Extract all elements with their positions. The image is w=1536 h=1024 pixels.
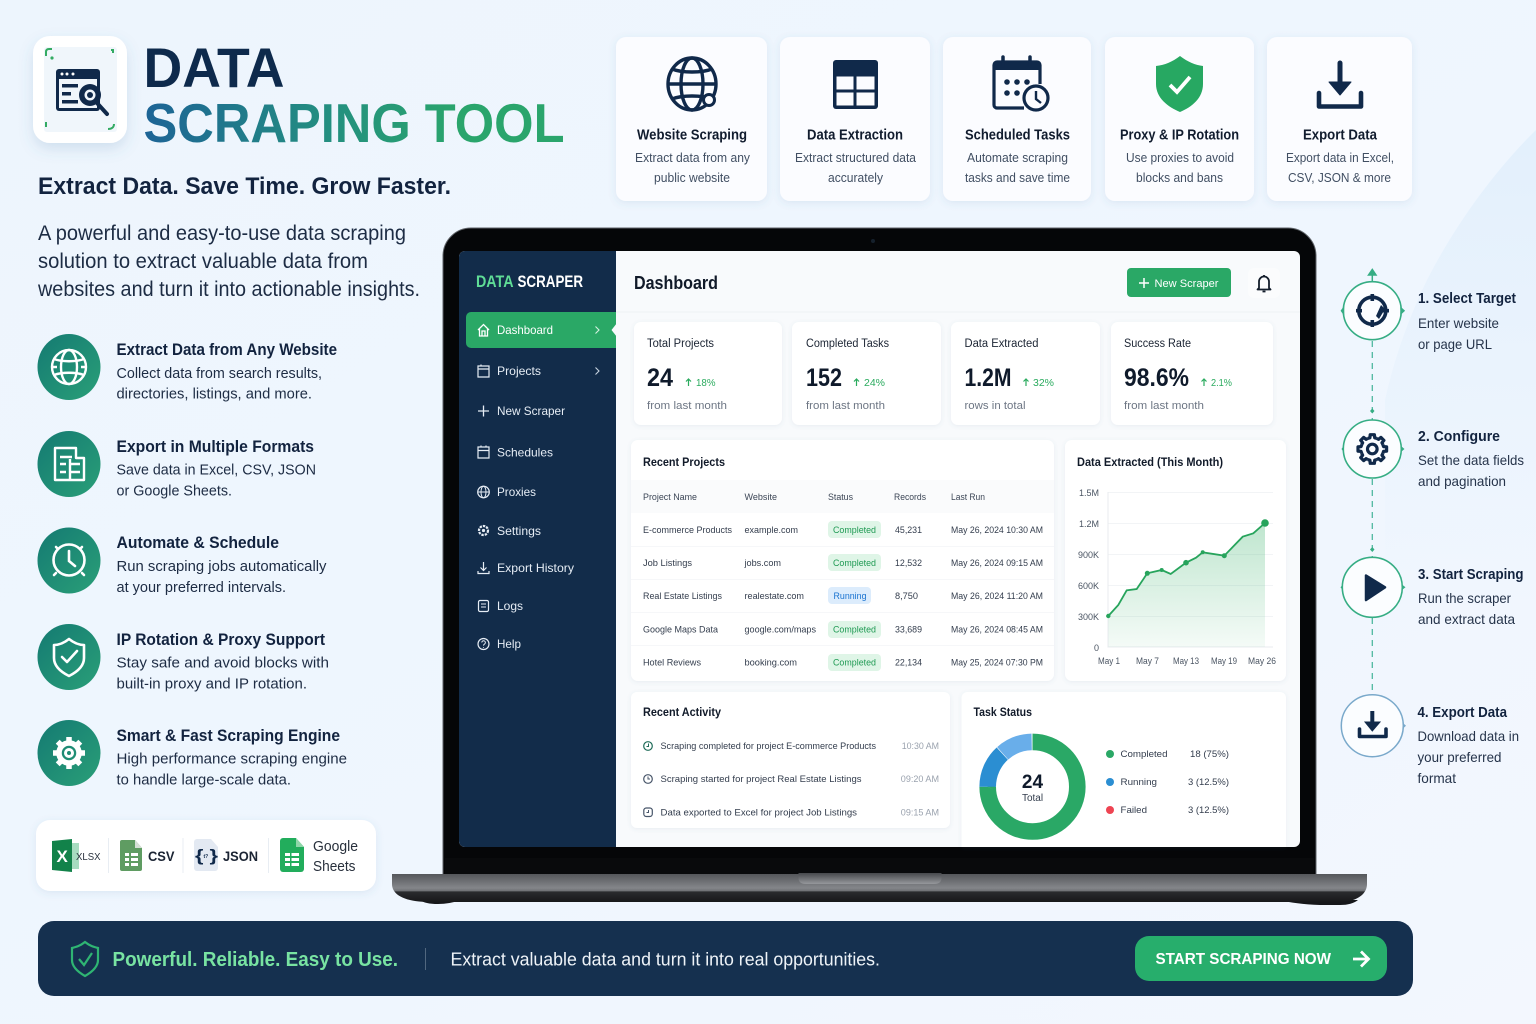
chart: data extracted this month: May 13 bbox=[1173, 656, 1199, 666]
stat: total projects bbox=[634, 322, 782, 425]
feature: proxy support: Stay safe and avoid blocks with bbox=[116, 654, 329, 672]
feature card: data extraction: Extract structured data bbox=[795, 151, 916, 165]
table: recent projects: Records bbox=[894, 492, 926, 502]
feature: fast engine: Smart & Fast Scraping Engine bbox=[116, 727, 340, 745]
feature: proxy support: built-in proxy and IP rotation. bbox=[116, 676, 307, 692]
legend: Running bbox=[1120, 777, 1157, 787]
feature: automate and schedule bbox=[38, 528, 327, 596]
feature card: website scraping: Website Scraping bbox=[637, 128, 747, 144]
step 4: export data: format bbox=[1418, 770, 1456, 786]
table: recent projects: Website bbox=[744, 492, 777, 502]
stat: completed tasks: 152 bbox=[806, 364, 842, 392]
row: google maps: 33,689 bbox=[895, 624, 922, 634]
tagline: Extract Data. Save Time. Grow Faster. bbox=[38, 173, 451, 200]
row: hotel reviews bbox=[643, 654, 1043, 671]
icon: json: t? bbox=[204, 854, 208, 860]
step 3: start scraping: Run the scraper bbox=[1418, 590, 1511, 606]
step 3: start scraping: and extract data bbox=[1418, 611, 1515, 627]
step 1: select target: 1. Select Target bbox=[1418, 291, 1516, 307]
stat: success rate: Success Rate bbox=[1124, 338, 1191, 350]
stat: completed tasks: Completed Tasks bbox=[806, 338, 889, 350]
row: job listings: jobs.com bbox=[744, 558, 781, 568]
row: hotel reviews: May 25, 2024 07:30 PM bbox=[951, 658, 1043, 668]
row: real estate: 8,750 bbox=[895, 591, 918, 601]
icon: google sheets bbox=[280, 838, 358, 875]
feature: fast engine bbox=[38, 720, 347, 788]
step 2: configure: Set the data fields bbox=[1418, 452, 1524, 468]
feature: fast engine: to handle large-scale data. bbox=[116, 772, 291, 788]
legend: 18 (75%) bbox=[1190, 749, 1229, 759]
activity row 3 bbox=[644, 808, 939, 818]
panel: task status: Task Status bbox=[974, 707, 1032, 719]
feature: export formats: or Google Sheets. bbox=[116, 482, 232, 500]
feature: export formats: Export in Multiple Formats bbox=[116, 438, 314, 456]
stat: total projects: 24 bbox=[647, 364, 673, 392]
nav item: help: Help bbox=[497, 637, 521, 651]
title bbox=[144, 36, 564, 154]
title: DATA bbox=[144, 36, 284, 99]
feature card: website scraping: public website bbox=[654, 171, 730, 185]
nav item: projects bbox=[478, 364, 599, 378]
row: job listings: May 26, 2024 09:15 AM bbox=[951, 558, 1043, 568]
step 2: configure: 2. Configure bbox=[1418, 429, 1500, 445]
table: recent projects bbox=[631, 440, 1054, 681]
feature: automate and schedule: Run scraping jobs automatically bbox=[116, 558, 327, 575]
nav item: logs: Logs bbox=[497, 599, 523, 613]
feature card: website scraping: Extract data from any bbox=[635, 151, 751, 165]
icon: json: { } bbox=[195, 846, 218, 865]
stat: completed tasks bbox=[792, 322, 941, 425]
feature: extract from any website: directories, listings, and more. bbox=[116, 386, 312, 402]
step 1: select target bbox=[1342, 270, 1516, 352]
feature card: proxy rotation: Use proxies to avoid bbox=[1126, 151, 1234, 165]
chart: data extracted this month bbox=[1065, 440, 1286, 681]
row: real estate: Real Estate Listings bbox=[643, 591, 722, 601]
dashboard screen bbox=[459, 251, 1300, 847]
feature card: scheduled tasks: Scheduled Tasks bbox=[965, 128, 1070, 144]
chart: data extracted this month: 1.5M bbox=[1079, 488, 1099, 498]
icon: xlsx: X bbox=[56, 847, 68, 866]
stat: success rate: from last month bbox=[1124, 400, 1204, 412]
feature card: website scraping bbox=[616, 37, 767, 201]
step 4: export data: your preferred bbox=[1418, 749, 1502, 765]
icon: json bbox=[194, 839, 258, 871]
intro paragraph: solution to extract valuable data from bbox=[38, 250, 368, 273]
row: hotel reviews: 22,134 bbox=[895, 658, 922, 668]
nav item: settings: Settings bbox=[497, 524, 541, 538]
laptop bbox=[392, 228, 1367, 905]
row: hotel reviews: Completed bbox=[833, 658, 876, 668]
row: job listings: Completed bbox=[833, 558, 876, 568]
table: recent projects: Last Run bbox=[951, 492, 985, 502]
legend: 3 (12.5%) bbox=[1188, 805, 1229, 815]
activity row 2: Scraping started for project Real Estate Listings bbox=[660, 774, 862, 784]
bottom banner bbox=[38, 921, 1413, 996]
row: e-commerce: May 26, 2024 10:30 AM bbox=[951, 525, 1043, 535]
feature: extract from any website: Collect data from search results, bbox=[116, 365, 322, 382]
chart: data extracted this month: 0 bbox=[1094, 643, 1099, 653]
legend: Completed bbox=[1120, 749, 1168, 759]
stat: completed tasks: from last month bbox=[806, 400, 885, 412]
feature card: proxy rotation bbox=[1105, 37, 1254, 201]
stat: total projects: Total Projects bbox=[647, 338, 714, 350]
row: google maps: Google Maps Data bbox=[643, 624, 719, 634]
stat: success rate bbox=[1111, 322, 1273, 425]
panel: recent activity bbox=[631, 692, 950, 828]
step 3: start scraping: 3. Start Scraping bbox=[1418, 567, 1524, 583]
chart: data extracted this month: 900K bbox=[1078, 550, 1099, 560]
feature: proxy support: IP Rotation & Proxy Support bbox=[116, 631, 325, 649]
dashboard header bbox=[616, 268, 1300, 312]
feature: automate and schedule: Automate & Schedule bbox=[116, 534, 279, 552]
feature card: export data: Export data in Excel, bbox=[1286, 151, 1394, 165]
step 4: export data: 4. Export Data bbox=[1418, 705, 1508, 721]
feature: automate and schedule: at your preferred intervals. bbox=[116, 579, 286, 596]
feature card: scheduled tasks: Automate scraping bbox=[967, 151, 1068, 165]
icon: xlsx: XLSX bbox=[76, 851, 100, 863]
row: google maps: Completed bbox=[833, 624, 876, 634]
icon: shield bbox=[72, 942, 98, 976]
stat: total projects: from last month bbox=[647, 400, 727, 412]
dashboard header: New Scraper bbox=[1154, 278, 1219, 290]
row: e-commerce: E-commerce Products bbox=[643, 525, 732, 535]
donut chart bbox=[988, 742, 1077, 832]
row: real estate: Running bbox=[834, 591, 866, 601]
feature card: proxy rotation: blocks and bans bbox=[1136, 171, 1223, 185]
nav item: schedules: Schedules bbox=[497, 446, 553, 460]
panel: recent activity: Recent Activity bbox=[643, 707, 722, 719]
stat: data extracted: 32% bbox=[1033, 377, 1054, 389]
step 1: select target: Enter website bbox=[1418, 315, 1499, 331]
activity row 2 bbox=[644, 774, 939, 784]
row: google maps: May 26, 2024 08:45 AM bbox=[951, 624, 1043, 634]
nav item: settings bbox=[479, 524, 541, 538]
activity row 3: 09:15 AM bbox=[901, 808, 939, 818]
chart: data extracted this month: 600K bbox=[1078, 581, 1099, 591]
row: real estate: realestate.com bbox=[744, 591, 804, 601]
nav item: logs bbox=[478, 599, 523, 613]
intro paragraph: A powerful and easy-to-use data scraping bbox=[38, 222, 406, 245]
activity row 2: 09:20 AM bbox=[901, 774, 939, 784]
stat: completed tasks: 24% bbox=[864, 377, 885, 389]
legend: Failed bbox=[1120, 805, 1147, 815]
step 4: export data: Download data in bbox=[1418, 728, 1519, 744]
row: real estate: May 26, 2024 11:20 AM bbox=[951, 591, 1043, 601]
nav item: projects: Projects bbox=[497, 364, 541, 378]
icon: xlsx bbox=[52, 839, 100, 872]
row: e-commerce: example.com bbox=[744, 525, 798, 535]
row: hotel reviews: Hotel Reviews bbox=[643, 658, 701, 668]
nav item: new scraper: New Scraper bbox=[497, 404, 565, 418]
step 3: start scraping bbox=[1340, 547, 1524, 627]
donut chart: 24 bbox=[1022, 772, 1043, 793]
feature card: scheduled tasks: tasks and save time bbox=[965, 171, 1070, 185]
row: hotel reviews: booking.com bbox=[744, 658, 797, 668]
feature card: data extraction: Data Extraction bbox=[807, 128, 903, 144]
call to action button bbox=[1135, 936, 1387, 981]
stat: success rate: 2.1% bbox=[1211, 377, 1232, 389]
feature card: export data: CSV, JSON & more bbox=[1288, 171, 1391, 185]
row: e-commerce bbox=[643, 521, 1043, 538]
nav item: help bbox=[478, 637, 521, 651]
feature: extract from any website bbox=[38, 334, 337, 402]
dashboard header: Dashboard bbox=[634, 272, 718, 293]
feature: fast engine: High performance scraping engine bbox=[116, 750, 347, 768]
icon: json: JSON bbox=[223, 848, 258, 864]
activity row 1: Scraping completed for project E-commerce Products bbox=[660, 741, 876, 751]
table: recent projects: Project Name bbox=[643, 492, 697, 502]
banner slogan: Powerful. Reliable. Easy to Use. bbox=[112, 949, 398, 971]
row: e-commerce: 45,231 bbox=[895, 525, 922, 535]
banner message: Extract valuable data and turn it into real opportunities. bbox=[450, 948, 880, 970]
chart: data extracted this month: May 19 bbox=[1211, 656, 1237, 666]
row: real estate bbox=[643, 587, 1043, 604]
panel: export formats bbox=[36, 820, 376, 891]
chart: data extracted this month: 300K bbox=[1078, 612, 1099, 622]
icon: csv bbox=[120, 840, 175, 871]
stat: total projects: 18% bbox=[696, 377, 716, 389]
step 4: export data bbox=[1341, 695, 1519, 786]
laptop base bbox=[392, 873, 1367, 905]
donut chart: Total bbox=[1022, 793, 1043, 804]
step 2: configure: and pagination bbox=[1418, 473, 1506, 489]
feature card: export data: Export Data bbox=[1303, 128, 1378, 144]
stat: data extracted bbox=[951, 322, 1100, 425]
feature card: export data bbox=[1267, 37, 1412, 201]
chart: data extracted this month: May 1 bbox=[1098, 656, 1120, 666]
icon: google sheets: Sheets bbox=[313, 859, 356, 875]
chart: data extracted this month: May 26 bbox=[1248, 656, 1276, 666]
stat: success rate: 98.6% bbox=[1124, 364, 1189, 392]
row: google maps: google.com/maps bbox=[744, 624, 816, 634]
feature: export formats bbox=[38, 431, 316, 500]
intro paragraph: websites and turn it into actionable insights. bbox=[37, 278, 420, 301]
row: e-commerce: Completed bbox=[833, 525, 876, 535]
nav item: proxies bbox=[478, 485, 536, 499]
activity row 1: 10:30 AM bbox=[902, 741, 939, 751]
feature card: scheduled tasks bbox=[943, 37, 1091, 201]
panel: task status bbox=[962, 692, 1286, 847]
feature card: data extraction bbox=[780, 37, 930, 201]
chart: data extracted this month: 1.2M bbox=[1079, 519, 1099, 529]
nav item: dashboard active: Dashboard bbox=[497, 323, 553, 337]
nav item: dashboard active bbox=[466, 312, 617, 348]
call to action button: START SCRAPING NOW bbox=[1156, 951, 1332, 968]
activity row 3: Data exported to Excel for project Job Listings bbox=[660, 808, 857, 818]
feature card: proxy rotation: Proxy & IP Rotation bbox=[1120, 128, 1239, 144]
stat: data extracted: rows in total bbox=[964, 400, 1026, 412]
row: job listings bbox=[643, 554, 1043, 571]
step 1: select target: or page URL bbox=[1418, 336, 1492, 352]
chart: data extracted this month: May 7 bbox=[1136, 656, 1159, 666]
feature: extract from any website: Extract Data from Any Website bbox=[116, 341, 337, 359]
workflow connector bbox=[1371, 341, 1373, 694]
stat: data extracted: Data Extracted bbox=[964, 338, 1038, 350]
row: job listings: Job Listings bbox=[643, 558, 692, 568]
laptop lid bbox=[443, 228, 1316, 876]
table: recent projects: Status bbox=[828, 492, 853, 502]
intro paragraph bbox=[37, 222, 420, 301]
legend: 3 (12.5%) bbox=[1188, 777, 1229, 787]
title: SCRAPING TOOL bbox=[144, 92, 564, 154]
step 2: configure bbox=[1342, 408, 1524, 489]
icon: csv: CSV bbox=[148, 848, 175, 864]
nav item: export history: Export History bbox=[497, 561, 574, 575]
legend bbox=[1106, 749, 1229, 815]
row: google maps bbox=[643, 621, 1043, 638]
sidebar: SCRAPER bbox=[518, 273, 583, 291]
feature: export formats: Save data in Excel, CSV, JSON bbox=[116, 462, 316, 478]
sidebar bbox=[459, 251, 617, 847]
header logo icon bbox=[33, 36, 127, 143]
nav item: proxies: Proxies bbox=[497, 485, 536, 499]
sidebar: DATA bbox=[476, 273, 514, 291]
chart: data extracted this month: Data Extracted (This Month) bbox=[1077, 457, 1223, 469]
feature card: data extraction: accurately bbox=[828, 171, 884, 185]
feature: proxy support bbox=[38, 624, 329, 692]
table: recent projects: Recent Projects bbox=[643, 457, 725, 469]
stat: data extracted: 1.2M bbox=[964, 364, 1012, 392]
icon: google sheets: Google bbox=[313, 839, 358, 855]
row: job listings: 12,532 bbox=[895, 558, 922, 568]
